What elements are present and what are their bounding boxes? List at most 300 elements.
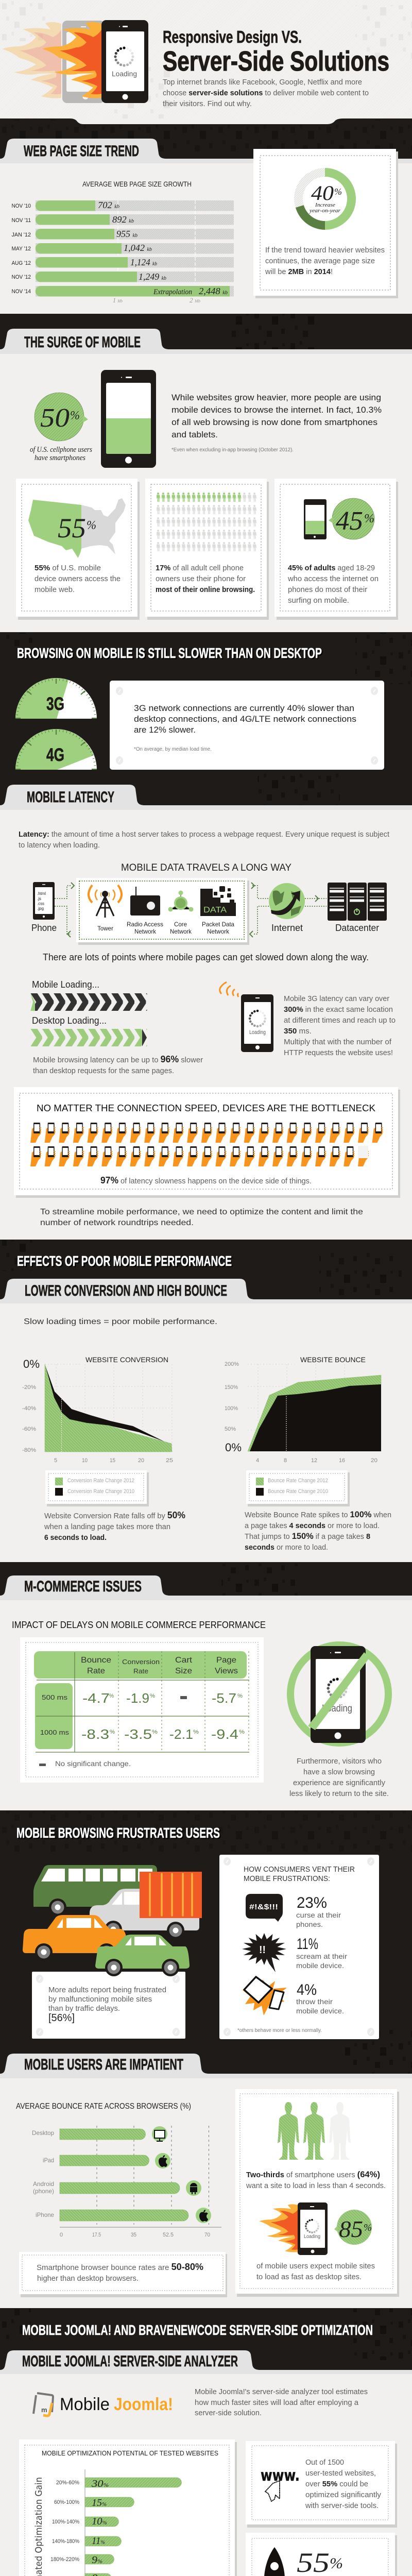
caption: bounce: a page takes 4 seconds or more to load. — [245, 1521, 380, 1530]
chart title: AVERAGE BOUNCE RATE ACROSS BROWSERS (%) — [16, 2102, 191, 2111]
bus — [33, 1865, 157, 1916]
definition: Latency: the amount of time a host server takes to process a webpage request. Every unique request is subject — [19, 830, 390, 839]
icon: core — [168, 890, 194, 912]
donut chart: 40 — [311, 181, 334, 205]
ghost flames — [2, 22, 61, 98]
latency note: than desktop requests for the same pages. — [33, 1066, 174, 1075]
card: bottleneck: 97% of latency slowness happens on the device side of things. — [100, 1175, 312, 1185]
title: Responsive Design VS. — [163, 27, 302, 46]
bar chart: bounce by browser: 17.5 — [92, 2232, 101, 2238]
heading tab — [0, 2054, 412, 2078]
network box: Radio Access — [127, 921, 163, 928]
logo: mobile joomla: Mobile — [60, 2395, 110, 2414]
icon: www cursor: www. — [261, 2467, 300, 2485]
header notch — [70, 118, 343, 124]
bar chart: bounce by browser: 35 — [131, 2232, 136, 2238]
heading tab — [0, 1279, 412, 1303]
bar chart: bounce by browser: 52.5 — [163, 2232, 174, 2238]
card: bottleneck — [14, 1087, 400, 1198]
diagram: data path — [31, 878, 387, 945]
bar chart — [49, 2469, 216, 2576]
icon: speech bubble: #!&$!!! — [249, 1903, 278, 1911]
diagram heading: MOBILE DATA TRAVELS A LONG WAY — [121, 862, 291, 873]
stat: 4 percent: 4% — [297, 1981, 317, 1998]
gauge: 3G — [15, 678, 97, 719]
icon: android — [186, 2180, 201, 2196]
icon: phone with signal — [220, 982, 273, 1052]
table heading: IMPACT OF DELAYS ON MOBILE COMMERCE PERFORMANCE — [12, 1620, 266, 1630]
panel: mobile latency — [0, 785, 412, 1227]
callout — [110, 681, 384, 770]
icon: loading phone — [101, 20, 148, 103]
bubble: 45 percent: % — [364, 512, 374, 526]
icon: flaming phone — [259, 2202, 328, 2255]
bar chart: 1 Mb — [113, 296, 123, 304]
icon: datacenter — [328, 883, 387, 921]
legend: bounce: Bounce Rate Change 2010 — [268, 1488, 328, 1495]
icon: rocket — [259, 2547, 289, 2576]
icon: half full phone — [101, 370, 156, 468]
text block: While websites grow heavier, more people are using — [171, 393, 381, 402]
table values: % — [239, 1729, 245, 1735]
callout: desktop connections, and 4G/LTE network connections — [134, 714, 356, 724]
bar chart: 11% — [92, 2535, 105, 2547]
card: bounce note — [19, 2252, 227, 2297]
heading tab: THE SURGE OF MOBILE — [24, 334, 141, 351]
donut chart: year-on-year — [309, 208, 341, 214]
bubble: 50 percent: of U.S. cellphone users — [30, 446, 92, 454]
latency stats text: 350 ms. — [284, 1027, 312, 1036]
header — [0, 0, 412, 120]
bubble: 85 percent: 85 — [339, 2216, 363, 2242]
bar chart: 20%-60% — [56, 2480, 79, 2486]
callout: traffic delays: [56%] — [48, 2012, 75, 2024]
bar chart: 100%-140% — [52, 2519, 79, 2525]
stat: 4 percent — [296, 1981, 344, 2015]
bar chart: 60%-100% — [54, 2499, 79, 2505]
text block: and tablets. — [171, 430, 218, 439]
column headers: Size — [175, 1667, 192, 1675]
chart: website bounce: WEBSITE BOUNCE — [300, 1355, 366, 1364]
table values: -5.7 — [212, 1690, 236, 1706]
bar chart: 10% — [92, 2516, 107, 2527]
card: 45 percent: who access the internet on — [287, 574, 379, 583]
heading tab: MOBILE LATENCY — [27, 789, 114, 806]
diagram: data path: Phone — [31, 923, 57, 933]
donut chart: % — [334, 187, 342, 197]
chart: website bounce: 16 — [339, 1458, 345, 1464]
orange car — [23, 1915, 126, 1961]
card: people grid: 17% of all adult cell phone — [156, 564, 244, 572]
caption: conversion — [44, 1510, 185, 1542]
gauge: 4G — [15, 729, 97, 770]
chart: website conversion: -80% — [22, 1447, 36, 1453]
heading tab — [0, 329, 412, 354]
diagram: data path: Datacenter — [335, 923, 379, 933]
donut chart: Increase — [315, 202, 335, 208]
icon: phone with files: .jpg — [37, 906, 44, 911]
chart: website bounce: 50% — [225, 1426, 236, 1432]
bubble: 50 percent: have smartphones — [35, 454, 85, 462]
bubble: 45 percent — [329, 498, 374, 539]
bar chart: bounce by browser: Desktop — [32, 2129, 54, 2137]
bar chart: 2,448 kb — [199, 286, 228, 296]
text block: less likely to return to the site. — [289, 1789, 389, 1798]
icon: phone with files: .css — [37, 902, 44, 906]
text block: of all web browsing is now done from smartphones — [171, 417, 377, 427]
chart title: AVERAGE WEB PAGE SIZE GROWTH — [82, 180, 192, 188]
panel: m-commerce issues — [0, 1575, 412, 1798]
chart: website bounce: 200% — [225, 1361, 239, 1367]
desktop loading bar — [30, 1015, 147, 1047]
icon: packet data: DATA — [203, 906, 227, 914]
card: 45 percent: surfing on mobile. — [288, 596, 349, 605]
table values: % — [237, 1693, 243, 1699]
card: people grid — [145, 479, 269, 620]
panel: mobile users are impatient — [0, 2054, 412, 2297]
bubble: 85 percent — [334, 2210, 372, 2245]
chart: website conversion: 5 — [54, 1458, 57, 1464]
column headers: Views — [215, 1667, 238, 1675]
callout: traffic delays: More adults report being frustrated — [48, 1986, 166, 1994]
chart: website conversion — [22, 1355, 173, 1464]
network box: Core — [174, 921, 187, 928]
column headers: Conversion — [122, 1658, 160, 1666]
icon: phone with files — [33, 882, 55, 920]
diagram: data path: Internet — [271, 923, 303, 933]
bar chart: bounce by browser: iPhone — [36, 2211, 54, 2218]
bar chart: 9% — [92, 2554, 102, 2566]
table values: -1.9 — [126, 1690, 149, 1706]
text block: experience are significantly — [293, 1778, 385, 1787]
panel: venting frustrations: *others behave more or less normally. — [237, 2028, 322, 2033]
bar chart: 702 kb — [98, 200, 119, 210]
column headers: Rate — [133, 1667, 148, 1675]
icon: phone with signal: Loading — [249, 1029, 266, 1036]
icon: speech bubble — [246, 1894, 283, 1922]
row labels: 1000 ms — [40, 1728, 70, 1736]
arrows — [67, 883, 318, 937]
flames — [42, 22, 101, 98]
caption: conversion: Website Conversion Rate falls off by 50% — [44, 1510, 185, 1520]
bar chart: 1,042 kb — [124, 243, 152, 253]
card: 40 percent increase: will be 2MB in 2014! — [265, 267, 333, 276]
mobile loading bar — [30, 979, 147, 1011]
chart: website bounce: 12 — [311, 1458, 317, 1464]
network box: Network — [170, 928, 192, 935]
card: user-tested websites: over 55% could be — [305, 2480, 368, 2488]
card: 40 percent increase: If the trend toward heavier websites — [265, 246, 385, 255]
intro text: server-side solution. — [195, 2409, 262, 2417]
conclusion text: To streamline mobile performance, we need to optimize the content and limit the — [40, 1208, 363, 1216]
logo: mobile joomla: m — [41, 2406, 47, 2414]
icon: prohibited loading phone — [290, 1645, 388, 1743]
card: bottleneck: NO MATTER THE CONNECTION SPEED, DEVICES ARE THE BOTTLENECK — [37, 1103, 375, 1113]
desktop loading bar: Desktop Loading... — [32, 1015, 107, 1026]
card: bounce note: Smartphone browser bounce rates are 50-80% — [37, 2262, 203, 2272]
network box — [76, 878, 249, 945]
pictogram: 17 of 100 — [156, 493, 258, 554]
title — [163, 27, 389, 77]
icon: www cursor — [261, 2467, 300, 2501]
text block: *Even when excluding in-app browsing (October 2012). — [171, 447, 294, 453]
network box: Packet Data — [202, 921, 234, 928]
card: expectations — [235, 2089, 399, 2297]
card: user-tested websites — [246, 2441, 397, 2528]
chart: website conversion: WEBSITE CONVERSION — [85, 1355, 168, 1364]
icon: phone with files: .html — [37, 891, 46, 896]
bar chart: 15% — [92, 2497, 107, 2509]
definition — [19, 830, 390, 850]
chart: website bounce — [225, 1355, 381, 1464]
callout: 3G network connections are currently 40% slower than — [134, 703, 354, 713]
latency note — [33, 1054, 203, 1075]
heading tab — [0, 1575, 412, 1600]
map — [28, 498, 126, 558]
row labels: 500 ms — [42, 1693, 68, 1701]
icon: tower — [89, 885, 122, 918]
card: 45 percent: 45% of adults aged 18-29 — [288, 564, 375, 572]
card: boosted sites — [246, 2533, 397, 2576]
heading tab: MOBILE JOOMLA! SERVER-SIDE ANALYZER — [22, 2353, 238, 2370]
card: 45 percent — [274, 479, 398, 620]
bar chart: bounce by browser: Android — [33, 2180, 54, 2188]
mobile loading bar: Mobile Loading... — [32, 979, 99, 990]
heading tab: M-COMMERCE ISSUES — [24, 1578, 142, 1595]
column headers: Cart — [175, 1656, 193, 1665]
gauge: 3G: 3G — [46, 694, 64, 714]
table values: -2.1 — [169, 1726, 193, 1742]
card: expectations: to load as fast as desktop sites. — [256, 2273, 362, 2281]
icon: small phone — [304, 499, 327, 539]
table values: -8.3 — [81, 1726, 109, 1742]
bar chart: NOV '10 — [11, 203, 31, 209]
bubble: 45 percent: 45 — [336, 506, 363, 536]
icon: globe — [269, 883, 305, 919]
icon: phone with files: .js — [37, 896, 41, 901]
bar chart: MAY '12 — [11, 246, 31, 252]
conclusion text — [40, 1208, 363, 1227]
latency stats text: HTTP requests the website uses! — [284, 1048, 393, 1057]
intro text: Top internet brands like Facebook, Google, Netflix and more — [163, 78, 362, 87]
callout: traffic delays: by malfunctioning mobile sites — [48, 1995, 152, 2004]
card: expectations: of mobile users expect mobile sites — [256, 2262, 375, 2270]
icon: apple iphone — [196, 2208, 211, 2223]
card: user-tested websites: with server-side tools. — [305, 2501, 379, 2510]
stat: 4 percent: throw their — [296, 1997, 333, 2006]
table card — [20, 1637, 264, 1783]
pictogram: hands — [30, 1123, 386, 1167]
icon: thrown phone — [242, 1977, 287, 2015]
panel: venting frustrations: MOBILE FRUSTRATIONS: — [244, 1874, 330, 1883]
heading: EFFECTS OF POOR MOBILE PERFORMANCE — [17, 1253, 232, 1269]
card: boosted sites: % — [330, 2555, 343, 2572]
bar chart: bounce by browser: 70 — [204, 2232, 210, 2238]
card: user-tested websites: user-tested websites, — [305, 2469, 376, 2478]
stat: 11 percent — [296, 1936, 347, 1970]
intro text: their visitors. Find out why. — [163, 99, 252, 108]
bubble: 50 percent: % — [70, 409, 80, 422]
caption: bounce: That jumps to 150% if a page takes 8 — [245, 1531, 370, 1541]
panel: frustrates users — [16, 1825, 379, 2039]
heading: MOBILE BROWSING FRUSTRATES USERS — [16, 1825, 220, 1841]
network box: Network — [207, 928, 230, 935]
icon: desktop — [152, 2126, 167, 2142]
icon: prohibited loading phone: Loading — [322, 1703, 352, 1714]
bubble: 50 percent — [30, 393, 92, 462]
icon: apple ipad — [155, 2153, 170, 2168]
text block: mobile devices to browse the internet. In fact, 10.3% — [171, 405, 382, 415]
chart: website bounce: 150% — [225, 1384, 238, 1391]
card: user-tested websites: optimized significantly — [305, 2490, 381, 2499]
chart: website conversion: 10 — [82, 1458, 88, 1464]
card: US map: device owners access the — [35, 574, 121, 583]
heading tab: LOWER CONVERSION AND HIGH BOUNCE — [25, 1282, 227, 1299]
network box: Tower — [97, 925, 113, 932]
latency stats text: Multiply that with the number of — [284, 1038, 392, 1046]
row labels — [40, 1693, 70, 1736]
text block — [289, 1757, 389, 1798]
truck — [90, 1872, 202, 1939]
chart: website bounce: 8 — [284, 1458, 287, 1464]
caption: conversion: when a landing page takes more than — [44, 1522, 170, 1531]
dotted links — [55, 886, 327, 934]
card: people grid: most of their online browsing. — [156, 585, 255, 594]
card: bounce note: higher than desktop browsers. — [37, 2274, 139, 2283]
panel: browsing slower — [15, 645, 384, 770]
legend: conversion — [45, 1470, 149, 1506]
stat: 23 percent: curse at their — [296, 1911, 341, 1919]
legend note: No significant change. — [55, 1759, 131, 1768]
panel: venting frustrations — [219, 1855, 379, 2039]
card: optimization chart: MOBILE OPTIMIZATION POTENTIAL OF TESTED WEBSITES — [42, 2449, 218, 2457]
icon: packet data — [200, 886, 236, 916]
latency stats text — [284, 994, 396, 1057]
table values — [81, 1690, 245, 1742]
stat: 23 percent: phones. — [296, 1920, 323, 1928]
intro text: Mobile Joomla!'s server-side analyzer tool estimates — [195, 2387, 368, 2396]
heading tab — [0, 139, 412, 163]
table values: % — [152, 1729, 158, 1735]
panel: effects of poor performance — [0, 1253, 412, 1552]
callout: are 12% slower. — [134, 725, 196, 735]
card: US map — [16, 479, 140, 620]
illustration: traffic jam — [23, 1865, 202, 1961]
bubble: 50 percent: 50 — [40, 403, 70, 433]
intro text — [195, 2387, 368, 2417]
text block: have a slow browsing — [303, 1768, 375, 1776]
stat: 11 percent: scream at their — [296, 1952, 347, 1960]
latency stats text: at different times and reach up to — [284, 1016, 396, 1025]
icon: burst: !! — [259, 1944, 266, 1956]
table values: -9.4 — [211, 1726, 238, 1742]
column headers — [81, 1656, 238, 1675]
panel: the surge of mobile — [0, 329, 412, 620]
card: 40 percent increase: continues, the average page size — [265, 257, 375, 265]
bar chart: bounce by browser: (phone) — [33, 2188, 54, 2195]
gauge: 4G: 4G — [46, 745, 64, 765]
chart: website conversion: 20 — [138, 1458, 144, 1464]
bar chart: 1,124 kb — [130, 257, 157, 267]
bar chart: bounce by browser: iPad — [43, 2157, 54, 2164]
table values: % — [110, 1729, 115, 1735]
caption: bounce: Website Bounce Rate spikes to 100% when — [245, 1510, 391, 1519]
icon: loading phone: Loading — [112, 70, 137, 78]
latency stats text: 300% in the exact same location — [284, 1005, 393, 1014]
shadowed statement: There are lots of points where mobile pages can get slowed down along the way. — [43, 952, 369, 962]
bar chart: bounce by browser: 0 — [60, 2232, 63, 2238]
card: optimization chart — [19, 2439, 237, 2576]
stat: 23 percent — [296, 1894, 341, 1928]
logo: mobile joomla — [33, 2393, 173, 2416]
chart: website conversion: 15 — [110, 1458, 115, 1464]
icon: radio — [130, 887, 160, 916]
intro text: how much faster sites will load after employing a — [195, 2398, 359, 2407]
panel: joomla and bravenewcode — [0, 2322, 412, 2576]
bar chart: 140%-180% — [52, 2538, 79, 2545]
bar chart: NOV '12 — [11, 274, 31, 280]
table values: % — [150, 1693, 155, 1699]
bar chart: NOV '14 — [11, 289, 31, 295]
card: people grid: owners use their phone for — [156, 574, 246, 583]
card: 40 percent increase — [253, 149, 398, 298]
column headers: Bounce — [81, 1656, 111, 1665]
legend: bounce — [246, 1470, 350, 1506]
chart: website conversion: 0% — [23, 1358, 40, 1370]
definition: to latency when loading. — [19, 841, 100, 850]
green car — [95, 1935, 190, 1976]
chart: website conversion: -60% — [22, 1426, 36, 1432]
intro text: choose server-side solutions to deliver mobile web content to — [163, 89, 369, 97]
bubble: 85 percent: % — [364, 2222, 372, 2233]
legend: bounce: Bounce Rate Change 2012 — [268, 1478, 328, 1484]
latency note: Mobile browsing latency can be up to 96% slower — [33, 1054, 203, 1064]
chart: website bounce: 100% — [225, 1405, 238, 1412]
intro: Slow loading times = poor mobile performance. — [24, 1317, 217, 1326]
logo: mobile joomla: Joomla! — [114, 2395, 173, 2414]
map: 55 — [58, 513, 86, 544]
card: expectations: want a site to load in less than 4 seconds. — [246, 2181, 386, 2190]
callout: traffic delays: than by traffic delays. — [48, 2004, 120, 2013]
stat: 4 percent: mobile device. — [296, 2007, 344, 2015]
chart: website conversion: 25 — [166, 1458, 173, 1464]
bar chart: 955 kb — [116, 229, 138, 239]
bar chart: bounce by browser — [32, 2126, 221, 2238]
callout: traffic delays — [32, 1972, 185, 2039]
heading tab: MOBILE USERS ARE IMPATIENT — [24, 2056, 183, 2073]
stat: 11 percent: 11% — [297, 1936, 318, 1953]
icon: flaming phone: Loading — [304, 2234, 320, 2240]
bar chart: 2 Mb — [190, 296, 200, 304]
table values: % — [109, 1693, 114, 1699]
bar chart: 892 kb — [112, 214, 134, 225]
intro text — [163, 78, 369, 108]
panel: venting frustrations: HOW CONSUMERS VENT THEIR — [244, 1865, 355, 1874]
table values: % — [193, 1729, 199, 1735]
caption: bounce: seconds or more to load. — [245, 1543, 328, 1552]
table values: -3.5 — [124, 1726, 152, 1742]
callout: *On average, by median load time. — [134, 747, 212, 752]
bar chart: Extrapolation — [153, 288, 192, 296]
stat: 11 percent: mobile device. — [296, 1961, 344, 1970]
chart: website bounce: 4 — [256, 1458, 259, 1464]
caption: conversion: 6 seconds to load. — [44, 1533, 107, 1542]
chart: website bounce: 20 — [371, 1458, 377, 1464]
card: 45 percent: phones do most of their — [288, 585, 367, 594]
legend: conversion: Conversion Rate Change 2012 — [67, 1478, 134, 1484]
chart: website bounce: 0% — [225, 1441, 242, 1454]
heading tab — [0, 785, 412, 810]
